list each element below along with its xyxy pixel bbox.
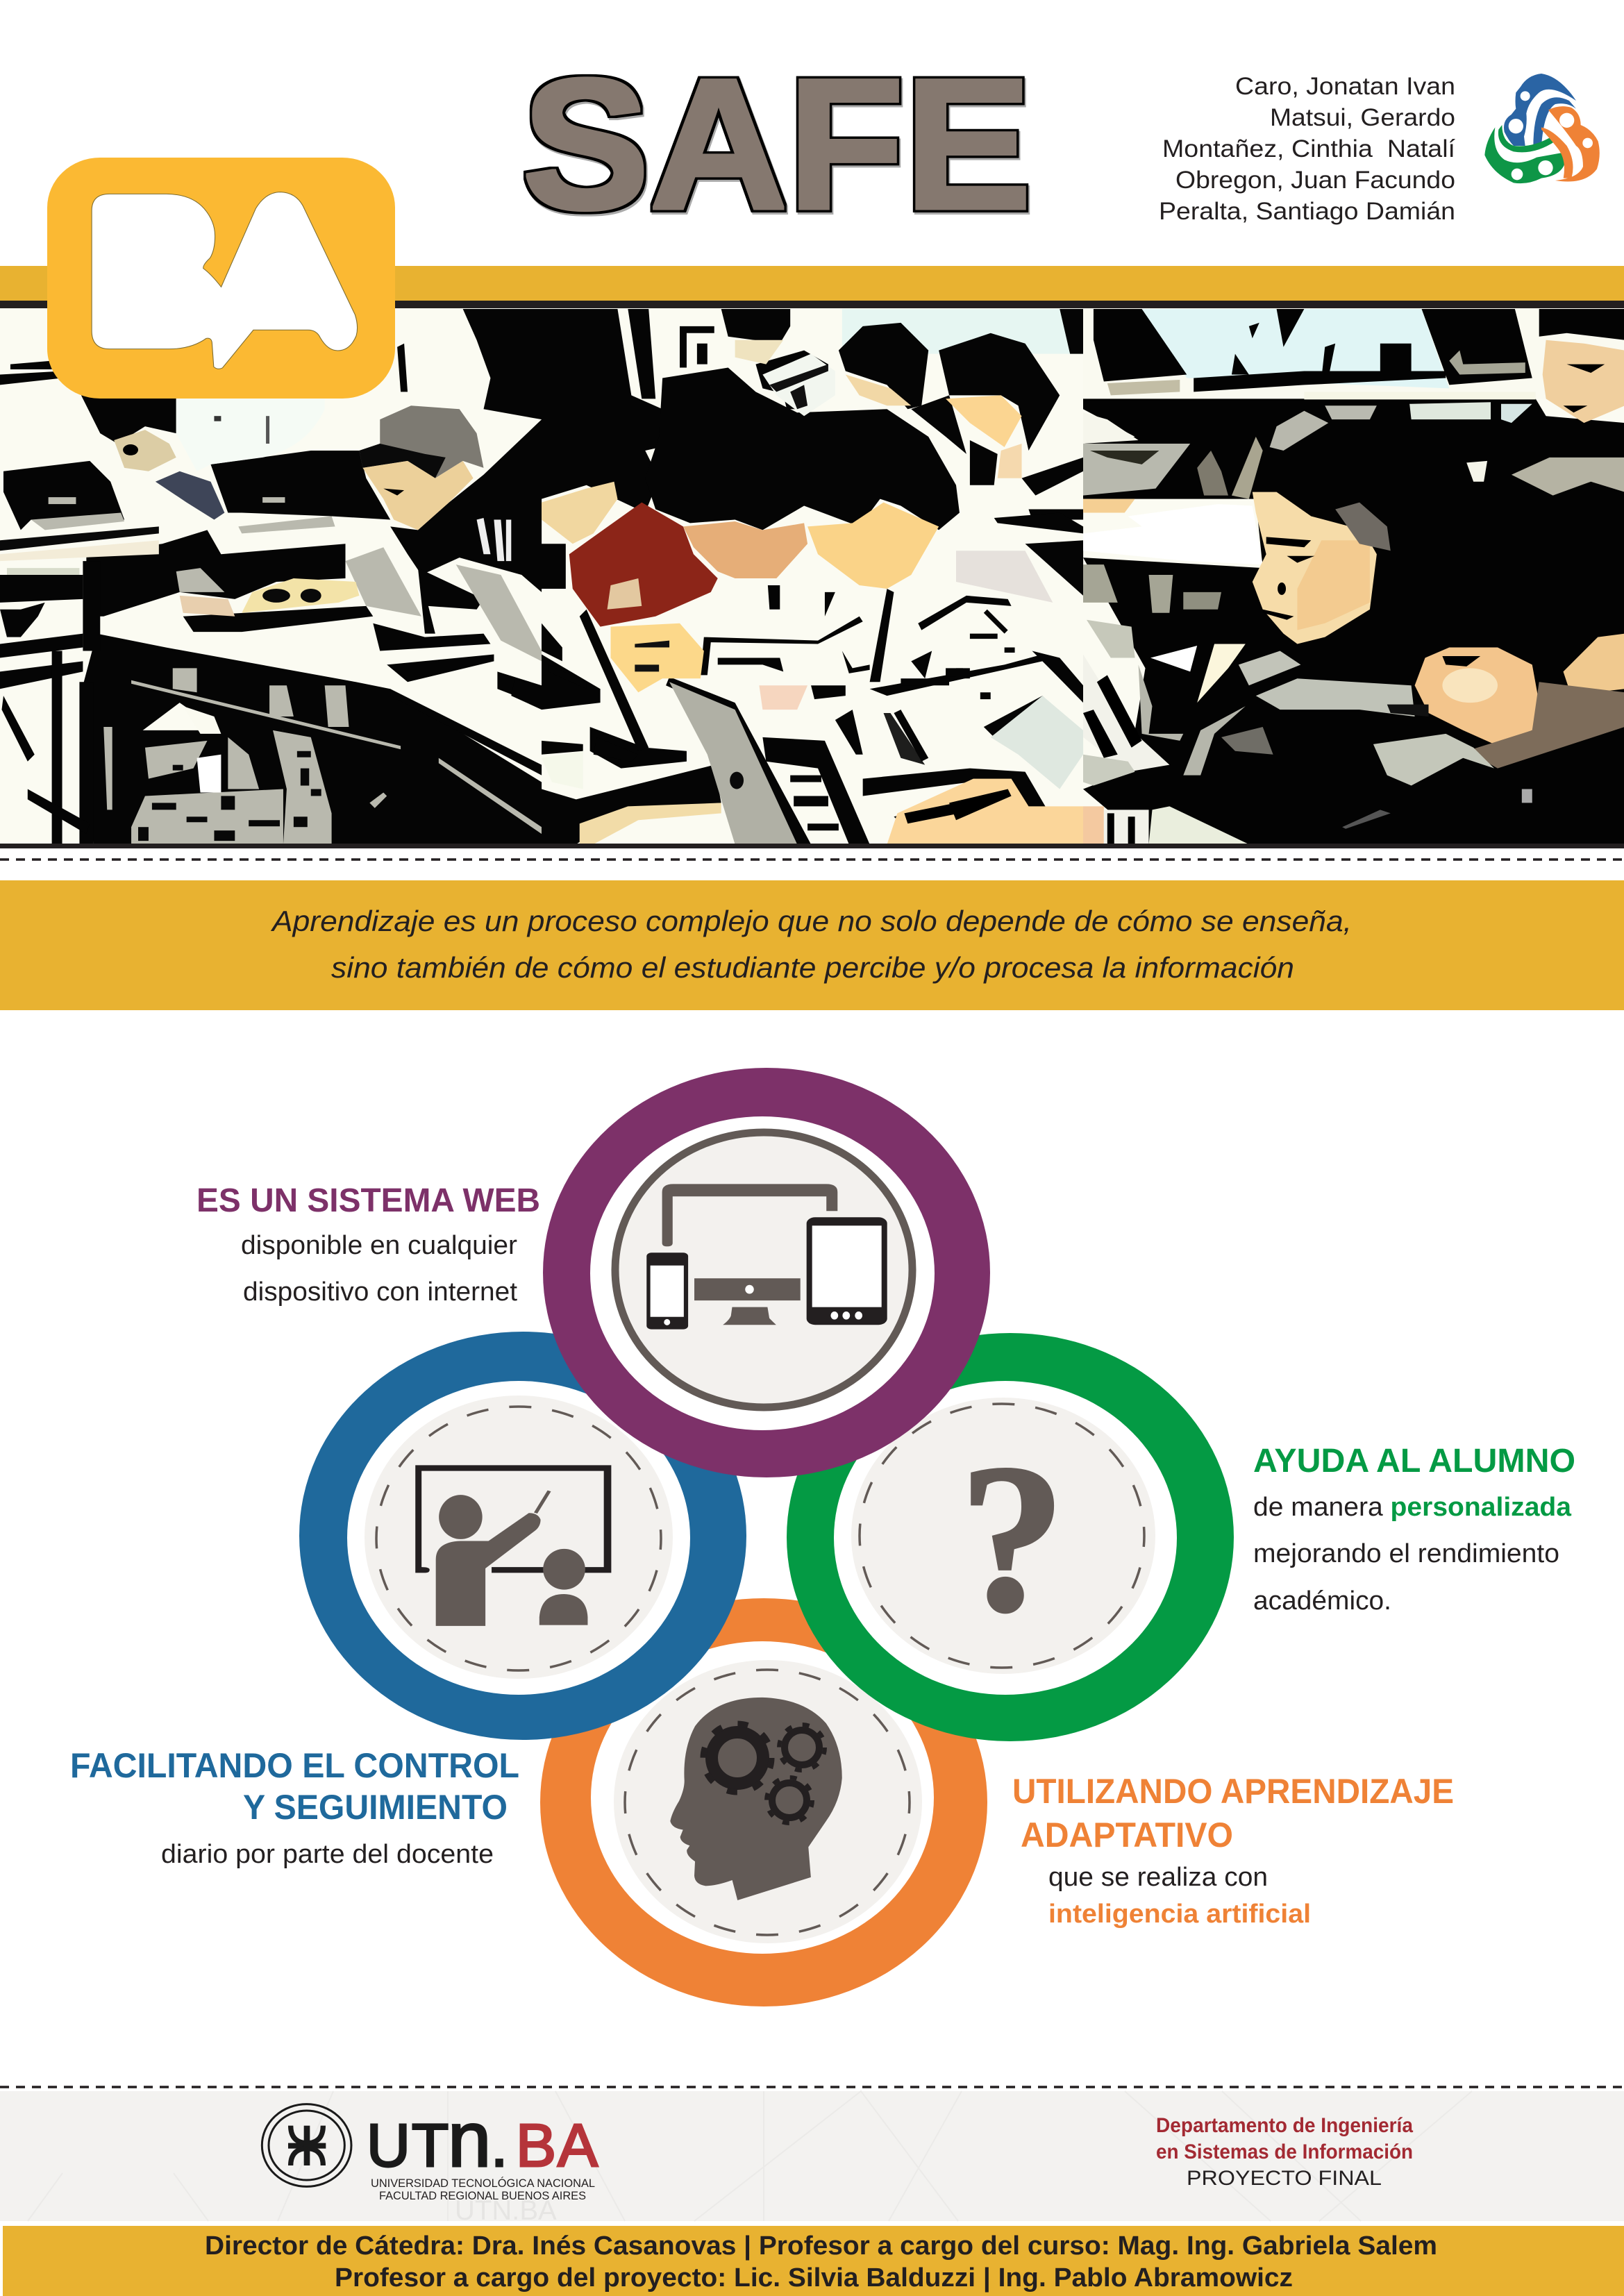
author names (1159, 73, 1455, 225)
text block: ayuda al alumno: de manera personalizada (1253, 1493, 1572, 1522)
author names: Peralta, Santiago Damián (1159, 198, 1455, 225)
text block: utilizando aprendizaje adaptativo: que se realiza con (1048, 1863, 1268, 1892)
circle: purple, devices (543, 1068, 990, 1477)
icon: head with gears (670, 1698, 842, 1900)
photo right third (1083, 309, 1624, 844)
header gold bar (0, 266, 1624, 301)
icon: UTN emblem (262, 2104, 351, 2186)
icon: teacher at board with student (415, 1465, 611, 1626)
photo center third (542, 309, 1084, 844)
author names: Montañez, Cinthia Natalí (1162, 135, 1455, 162)
circle: orange, artificial intelligence head (540, 1598, 987, 2006)
author names: Obregon, Juan Facundo (1175, 167, 1455, 194)
icon: phone, monitor and tablet (646, 1184, 887, 1330)
department text (1156, 2114, 1413, 2190)
icon: project logo (1484, 74, 1600, 183)
footer gold band with credits: Director de Cátedra: Dra. Inés Casanovas | Profesor a cargo del curso: Mag. Ing. Gabriela Salem (205, 2231, 1437, 2261)
text block: ayuda al alumno: académico. (1253, 1586, 1391, 1616)
department text: Departamento de Ingeniería (1156, 2114, 1413, 2137)
department text: PROYECTO FINAL (1187, 2167, 1382, 2190)
text block: es un sistema web: disponible en cualquier (241, 1231, 517, 1260)
text block: ayuda al alumno: mejorando el rendimiento (1253, 1539, 1559, 1568)
text block: utilizando aprendizaje adaptativo: ADAPTATIVO (1021, 1816, 1233, 1854)
gold tagline band: Aprendizaje es un proceso complejo que no solo depende de cómo se enseña, (270, 905, 1352, 937)
text block: utilizando aprendizaje adaptativo: inteligencia artificial (1048, 1900, 1311, 1929)
text block: ayuda al alumno (1253, 1443, 1575, 1616)
logo: UTN.BA: FACULTAD REGIONAL BUENOS AIRES (379, 2189, 586, 2202)
text block: facilitando el control: diario por parte del docente (161, 1840, 494, 1869)
logo: UTN.BA: UNIVERSIDAD TECNOLÓGICA NACIONAL (371, 2177, 595, 2190)
text block: es un sistema web: dispositivo con internet (243, 1277, 517, 1307)
photo: students working on laptops in a classroom (0, 308, 1624, 844)
title: SAFE (522, 40, 1032, 248)
gold tagline band: sino también de cómo el estudiante percibe y/o procesa la información (331, 951, 1294, 984)
footer grey band (0, 2091, 1624, 2226)
author names: Caro, Jonatan Ivan (1235, 73, 1455, 100)
circle: green, question mark (787, 1333, 1234, 1741)
photo left third (0, 309, 542, 844)
footer gold band with credits: Profesor a cargo del proyecto: Lic. Silvia Balduzzi | Ing. Pablo Abramowicz (335, 2263, 1293, 2293)
gold tagline band (0, 880, 1624, 1010)
department text: en Sistemas de Información (1156, 2140, 1413, 2163)
text block: es un sistema web (196, 1182, 540, 1307)
badge: BA speech logo (47, 158, 395, 399)
text block: ayuda al alumno: AYUDA AL ALUMNO (1253, 1443, 1575, 1480)
dashed divider (0, 858, 1624, 861)
text block: facilitando el control: Y SEGUIMIENTO (243, 1788, 508, 1827)
icon: question mark: ? (960, 1421, 1065, 1655)
logo: UTN.BA (262, 2096, 598, 2202)
text block: facilitando el control: FACILITANDO EL CONTROL (70, 1746, 519, 1785)
watermark: UTN.BA (455, 2195, 557, 2226)
text block: utilizando aprendizaje adaptativo: UTILIZANDO APRENDIZAJE (1012, 1772, 1454, 1811)
footer gold band with credits (3, 2226, 1624, 2296)
text block: facilitando el control (70, 1746, 519, 1869)
author names: Matsui, Gerardo (1270, 104, 1455, 131)
text block: utilizando aprendizaje adaptativo (1012, 1772, 1454, 1929)
dashed divider (0, 2086, 1624, 2088)
logo: UTN.BA: UTn.BA (367, 2096, 598, 2183)
circle: blue, teacher (299, 1332, 746, 1740)
text block: es un sistema web: ES UN SISTEMA WEB (196, 1182, 540, 1219)
